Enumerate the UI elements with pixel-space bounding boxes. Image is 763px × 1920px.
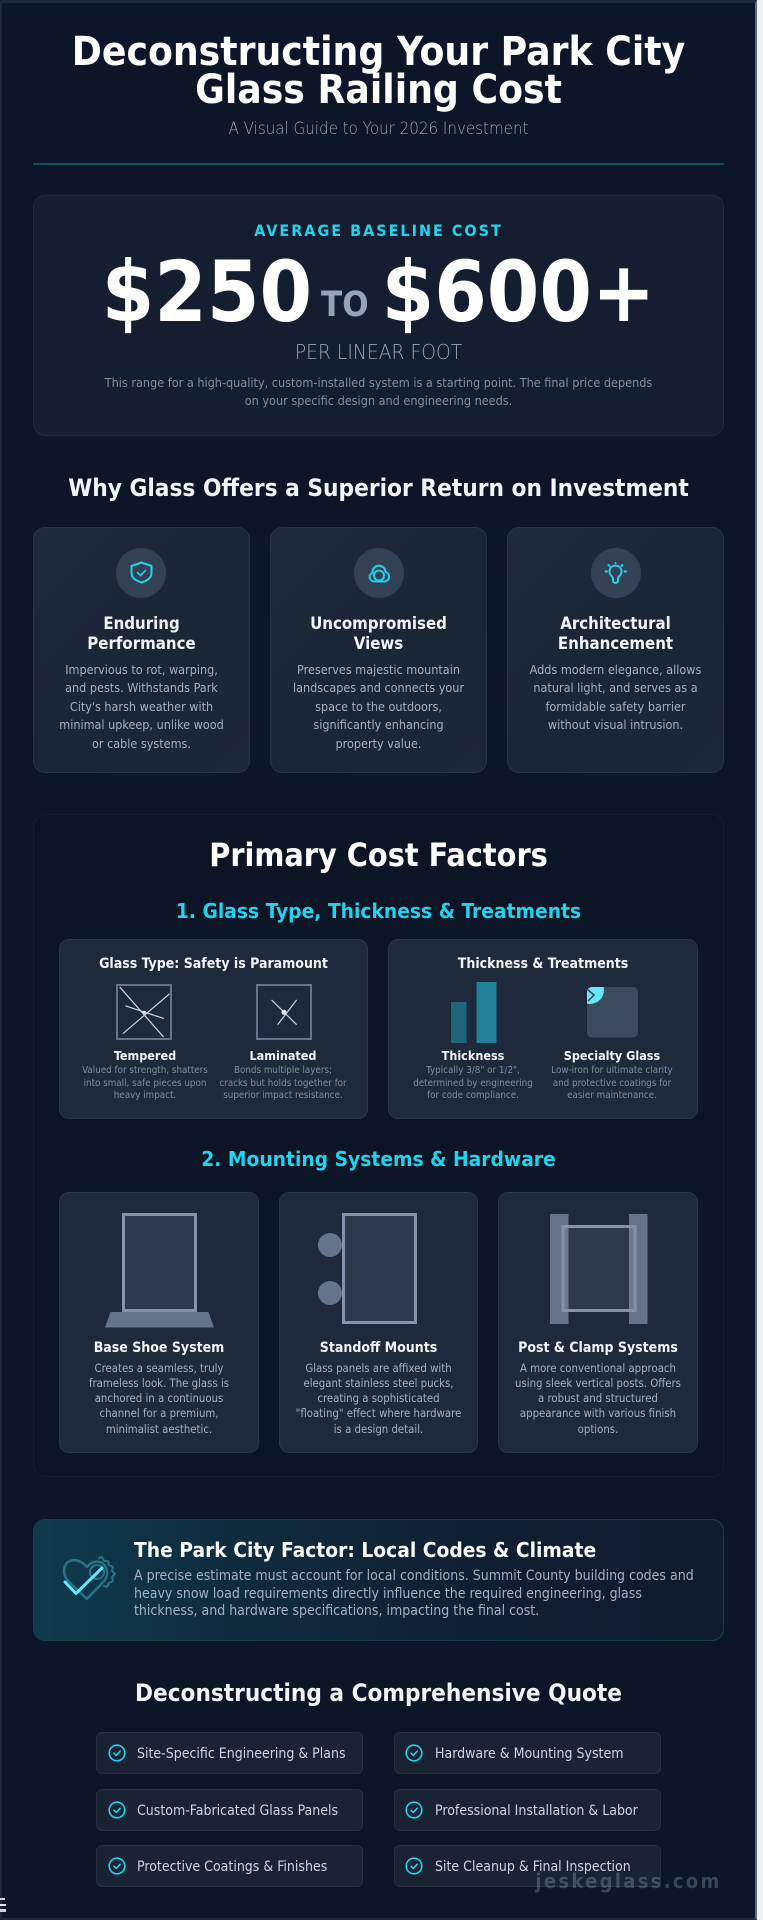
item text: Custom-Fabricated Glass Panels xyxy=(137,1803,338,1819)
card text: formidable safety barrier xyxy=(545,699,686,714)
text: Creates a seamless, truly xyxy=(95,1362,223,1375)
text xyxy=(515,1362,681,1436)
card text xyxy=(530,662,701,732)
card text: minimal upkeep, unlike wood xyxy=(59,717,224,732)
thickness text: Typically 3/8" or 1/2", xyxy=(426,1065,520,1076)
text: elegant stainless steel pucks, xyxy=(303,1377,454,1390)
panel: thickness and treatments xyxy=(388,939,698,1119)
icon: light bulb xyxy=(591,548,641,598)
item text: Protective Coatings & Finishes xyxy=(137,1859,327,1875)
laminated text: Bonds multiple layers; xyxy=(234,1065,332,1076)
quote item: coatings xyxy=(96,1845,363,1887)
heading: mounting systems and hardware: 2. Mounting Systems & Hardware xyxy=(201,1147,556,1171)
card title: Performance xyxy=(87,633,196,653)
callout: the park city factor xyxy=(33,1519,724,1641)
cost explanation xyxy=(104,375,652,408)
card text: significantly enhancing xyxy=(313,717,444,732)
card text: landscapes and connects your xyxy=(293,680,464,695)
thickness label: Thickness xyxy=(442,1048,504,1063)
card text: and pests. Withstands Park xyxy=(65,680,218,695)
panel: average baseline cost xyxy=(33,195,724,436)
callout text: heavy snow load requirements directly influence the required engineering, glass xyxy=(134,1586,642,1602)
specialty glass label: Specialty Glass xyxy=(564,1048,660,1063)
card text: Preserves majestic mountain xyxy=(297,662,460,677)
card text: without visual intrusion. xyxy=(548,717,683,732)
panel heading: Thickness & Treatments xyxy=(458,956,628,972)
text: a robust and structured xyxy=(538,1392,658,1405)
laminated text: cracks but holds together for xyxy=(219,1078,347,1089)
laminated label: Laminated xyxy=(250,1048,316,1063)
callout text: thickness, and hardware specifications, impacting the final cost. xyxy=(134,1603,539,1619)
icon: laminated glass xyxy=(256,984,312,1040)
quote item: hardware xyxy=(394,1732,661,1774)
header divider xyxy=(33,163,724,165)
heading: return on investment: Why Glass Offers a Superior Return on Investment xyxy=(68,474,689,502)
text: options. xyxy=(578,1423,618,1436)
panel: standoff mounts xyxy=(279,1192,478,1453)
specialty glass text xyxy=(551,1065,673,1101)
card text: property value. xyxy=(336,736,421,751)
tempered text: heavy impact. xyxy=(114,1090,176,1101)
callout title: The Park City Factor: Local Codes & Climate xyxy=(134,1538,596,1562)
cost explanation: on your specific design and engineering needs. xyxy=(245,393,512,408)
text: creating a sophisticated xyxy=(317,1392,440,1405)
card text: natural light, and serves as a xyxy=(533,680,698,695)
card title: Architectural xyxy=(560,613,671,633)
card title: Views xyxy=(354,633,403,653)
card title xyxy=(87,613,196,653)
text: is a design detail. xyxy=(334,1423,423,1436)
icon: standoff mounts xyxy=(318,1213,417,1324)
tempered text xyxy=(82,1065,208,1101)
icon: check xyxy=(108,1801,126,1819)
icon: check xyxy=(108,1857,126,1875)
quote item: installation xyxy=(394,1789,661,1831)
text xyxy=(296,1362,461,1436)
text xyxy=(89,1362,229,1436)
icon: shield check xyxy=(116,548,166,598)
text: using sleek vertical posts. Offers xyxy=(515,1377,681,1390)
callout text: A precise estimate must account for local conditions. Summit County building codes and xyxy=(134,1568,694,1584)
panel: uncompromised views xyxy=(270,527,487,773)
card text: space to the outdoors, xyxy=(315,699,442,714)
item text: Hardware & Mounting System xyxy=(435,1746,624,1762)
card text: or cable systems. xyxy=(92,736,191,751)
panel: architectural enhancement xyxy=(507,527,724,773)
icon: base shoe xyxy=(105,1213,214,1328)
tempered label: Tempered xyxy=(114,1048,176,1063)
text: anchored in a continuous xyxy=(95,1392,223,1405)
icon: check xyxy=(405,1857,423,1875)
text: appearance with various finish xyxy=(520,1407,676,1420)
text: A more conventional approach xyxy=(520,1362,676,1375)
card title: Enduring xyxy=(103,613,180,633)
specialty glass text: easier maintenance. xyxy=(567,1090,657,1101)
card title xyxy=(310,613,447,653)
card text: Impervious to rot, warping, xyxy=(65,662,218,677)
title: Deconstructing Your Park City xyxy=(72,28,685,75)
item text: Professional Installation & Labor xyxy=(435,1803,638,1819)
label: Post & Clamp Systems xyxy=(518,1340,678,1356)
thickness text: for code compliance. xyxy=(427,1090,519,1101)
laminated text: superior impact resistance. xyxy=(223,1090,343,1101)
text: frameless look. The glass is xyxy=(89,1377,229,1390)
specialty glass text: Low-iron for ultimate clarity xyxy=(551,1065,673,1076)
label: Base Shoe System xyxy=(94,1340,224,1356)
tempered text: into small, safe pieces upon xyxy=(84,1078,206,1089)
tempered text: Valued for strength, shatters xyxy=(82,1065,208,1076)
panel: enduring performance xyxy=(33,527,250,773)
icon: thickness bars xyxy=(451,982,496,1043)
icon: specialty glass xyxy=(587,987,638,1038)
laminated text xyxy=(219,1065,347,1101)
card title: Enhancement xyxy=(558,633,673,653)
specialty glass text: and protective coatings for xyxy=(553,1078,671,1089)
icon: check xyxy=(405,1801,423,1819)
quote item: cleanup xyxy=(394,1845,661,1887)
card text: City's harsh weather with xyxy=(70,699,213,714)
title: Glass Railing Cost xyxy=(195,66,562,113)
icon: check xyxy=(108,1744,126,1762)
price range: $250 TO$600+ xyxy=(102,243,655,341)
label: Standoff Mounts xyxy=(320,1340,437,1356)
text: minimalist aesthetic. xyxy=(106,1423,212,1436)
quote item: engineering xyxy=(96,1732,363,1774)
card text: Adds modern elegance, allows xyxy=(530,662,701,677)
icon: heart, gear and check xyxy=(62,1556,116,1600)
subtitle: A Visual Guide to Your 2026 Investment xyxy=(229,118,528,138)
callout text xyxy=(134,1568,694,1619)
card text xyxy=(59,662,224,751)
cost label: AVERAGE BASELINE COST xyxy=(254,221,503,240)
cost explanation: This range for a high-quality, custom-installed system is a starting point. The final price depends xyxy=(105,375,652,390)
card title: Uncompromised xyxy=(310,613,447,633)
icon: check xyxy=(405,1744,423,1762)
panel: post and clamp systems xyxy=(498,1192,698,1453)
per linear foot: PER LINEAR FOOT xyxy=(295,340,462,364)
panel: glass type xyxy=(59,939,368,1119)
thickness text: determined by engineering xyxy=(413,1078,533,1089)
watermark: jeskeglass.com xyxy=(535,1869,722,1893)
text: "floating" effect where hardware xyxy=(296,1407,461,1420)
heading: primary cost factors: Primary Cost Factors xyxy=(209,836,548,874)
heading: glass type, thickness and treatments: 1. Glass Type, Thickness & Treatments xyxy=(176,899,581,923)
icon: tempered glass xyxy=(116,984,172,1040)
panel: base shoe system xyxy=(59,1192,259,1453)
panel heading: Glass Type: Safety is Paramount xyxy=(99,956,328,972)
heading: comprehensive quote: Deconstructing a Comprehensive Quote xyxy=(135,1679,622,1707)
icon: post and clamp xyxy=(550,1214,648,1324)
item text: Site-Specific Engineering & Plans xyxy=(137,1746,346,1762)
thickness text xyxy=(413,1065,533,1101)
text: channel for a premium, xyxy=(99,1407,219,1420)
card title xyxy=(558,613,673,653)
quote item: glass panels xyxy=(96,1789,363,1831)
card text xyxy=(293,662,464,751)
title xyxy=(72,28,685,113)
item text: Site Cleanup & Final Inspection xyxy=(435,1859,631,1875)
panel: primary cost factors xyxy=(33,814,724,1477)
icon: cloud xyxy=(354,548,404,598)
text: Glass panels are affixed with xyxy=(305,1362,452,1375)
